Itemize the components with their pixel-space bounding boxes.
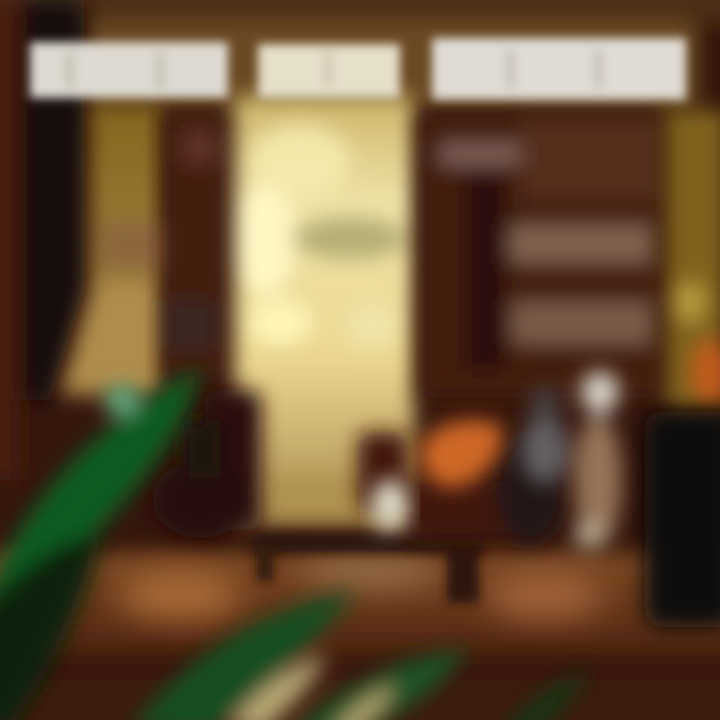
centre bright window [234,96,414,526]
right armchair [358,432,564,544]
black armchair right [645,412,720,627]
white object on table [371,479,409,531]
plant: large green leaf on left [0,368,200,720]
floor [0,552,720,720]
title text blocks [30,38,686,100]
left dark column [164,108,224,383]
floor highlights [118,558,603,619]
right bookshelf [420,108,662,398]
left curtain [0,0,84,480]
orange cushion [420,420,503,488]
plant: bottom green leaves [130,592,590,720]
left armchair [152,390,261,538]
right wall edge [666,110,720,410]
left window panel [60,105,175,395]
grey cat figure [521,371,622,549]
coffee table [252,534,484,603]
